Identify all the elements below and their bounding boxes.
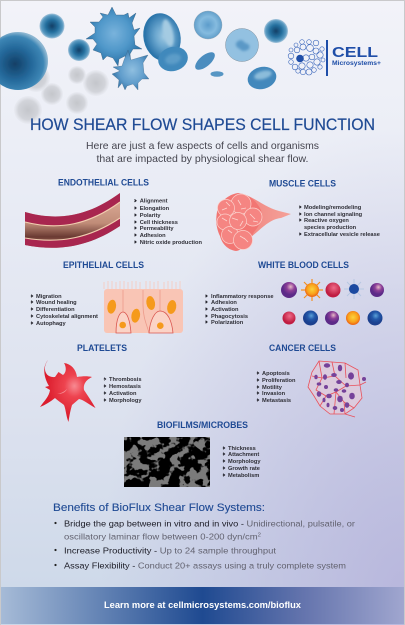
header cell illustration [0, 7, 288, 124]
list: white blood cells: Adhesion [211, 300, 237, 306]
list: biofilms: Thickness [228, 446, 256, 452]
benefits heading: Benefits of BioFlux Shear Flow Systems: [53, 502, 265, 514]
list: platelets: Thrombosis [109, 377, 142, 383]
subtitle: that are impacted by physiological shear flow. [96, 153, 308, 165]
list: platelets: Activation [109, 391, 137, 397]
list: biofilms [223, 446, 261, 479]
logo wordmark: CELL [332, 45, 378, 61]
list: epithelial: Cytoskeletal alignment [36, 314, 98, 320]
benefit: bridge the gap: Bridge the gap between in vitro and in vivo - Unidirectional, pulsatile, or [64, 518, 355, 528]
panel: endothelial cells [25, 176, 202, 248]
list: endothelial: Nitric oxide production [140, 240, 202, 246]
footer banner [1, 587, 404, 624]
logo: Microsystems+ [332, 61, 382, 67]
illustration: biofilm micrograph [124, 437, 210, 487]
illustration: muscle bundle [216, 193, 291, 251]
heading: epithelial: EPITHELIAL CELLS [63, 259, 144, 270]
list: endothelial: Permeability [140, 226, 174, 232]
list: platelets [104, 377, 142, 404]
list: white blood cells: Activation [211, 307, 239, 313]
list: cancer: Apoptosis [262, 371, 290, 377]
list: endothelial [134, 199, 202, 246]
heading: cancer: CANCER CELLS [269, 342, 336, 353]
list: endothelial: Polarity [140, 213, 161, 219]
illustration: blood vessel [25, 193, 120, 248]
list: muscle: Modeling/remodeling [304, 205, 362, 211]
list: biofilms: Metabolism [228, 473, 259, 479]
list: biofilms: Attachment [228, 452, 259, 458]
list: cancer: Motility [262, 385, 283, 391]
illustration: platelet [40, 360, 96, 422]
list: muscle [299, 205, 380, 238]
list: muscle: species production [304, 225, 357, 231]
footer text: Learn more at cellmicrosystems.com/bioflux [104, 600, 301, 610]
heading: platelets: PLATELETS [77, 342, 127, 353]
heading: biofilms: BIOFILMS/MICROBES [157, 419, 248, 430]
list: cancer: Proliferation [262, 378, 296, 384]
subtitle [86, 140, 319, 165]
illustration: cancer cells [308, 361, 366, 417]
list: epithelial: Differentiation [36, 307, 75, 313]
list: platelets: Morphology [109, 398, 142, 404]
list: endothelial: Cell thickness [140, 220, 178, 226]
panel: biofilms and microbes [124, 419, 261, 487]
logo [288, 40, 382, 76]
heading: muscle: MUSCLE CELLS [269, 178, 336, 188]
subtitle: Here are just a few aspects of cells and organisms [86, 140, 319, 152]
list: muscle: Extracellular vesicle release [304, 232, 380, 238]
benefit: productivity: Increase Productivity - Up to 24 sample throughput [64, 546, 277, 556]
list: endothelial: Alignment [140, 199, 168, 205]
list: cancer: Invasion [262, 391, 286, 397]
bullet dots [54, 523, 57, 565]
benefits section [53, 502, 355, 570]
list: endothelial: Adhesion [140, 233, 166, 239]
list: epithelial: Autophagy [36, 321, 67, 327]
list: white blood cells [206, 294, 274, 326]
list: biofilms: Growth rate [228, 466, 260, 472]
panel: white blood cells [206, 259, 384, 326]
list: white blood cells: Phagocytosis [211, 314, 248, 320]
list: cancer [257, 371, 296, 404]
list: biofilms: Morphology [228, 459, 261, 465]
heading: white blood cells: WHITE BLOOD CELLS [258, 259, 349, 270]
list: epithelial [31, 294, 98, 327]
title: HOW SHEAR FLOW SHAPES CELL FUNCTION [30, 116, 375, 134]
panel: cancer cells [257, 342, 366, 417]
list: platelets: Hemostasis [109, 384, 141, 390]
list: endothelial: Elongation [140, 206, 170, 212]
panel: muscle cells [216, 178, 380, 251]
panel: epithelial cells [31, 259, 183, 333]
list: white blood cells: Inflammatory response [211, 294, 274, 300]
heading: endothelial: ENDOTHELIAL CELLS [58, 176, 149, 188]
illustration: epithelial cells [104, 281, 183, 333]
list: muscle: Reactive oxygen [304, 218, 349, 224]
list: cancer: Metastasis [262, 398, 291, 404]
illustration: white blood cells [281, 279, 384, 326]
logo mark [288, 40, 325, 75]
benefit: bridge the gap continued: 2 [258, 532, 261, 538]
benefit: bridge the gap continued: oscillatory laminar flow between 0-200 dyn/cm [64, 532, 242, 542]
panel: platelets [40, 342, 142, 422]
list: epithelial: Wound healing [36, 300, 77, 306]
list: epithelial: Migration [36, 294, 62, 300]
list: white blood cells: Polarization [211, 320, 244, 326]
list: muscle: Ion channel signaling [304, 212, 363, 218]
benefit: flexibility: Assay Flexibility - Conduct 20+ assays using a truly complete system [64, 560, 346, 570]
